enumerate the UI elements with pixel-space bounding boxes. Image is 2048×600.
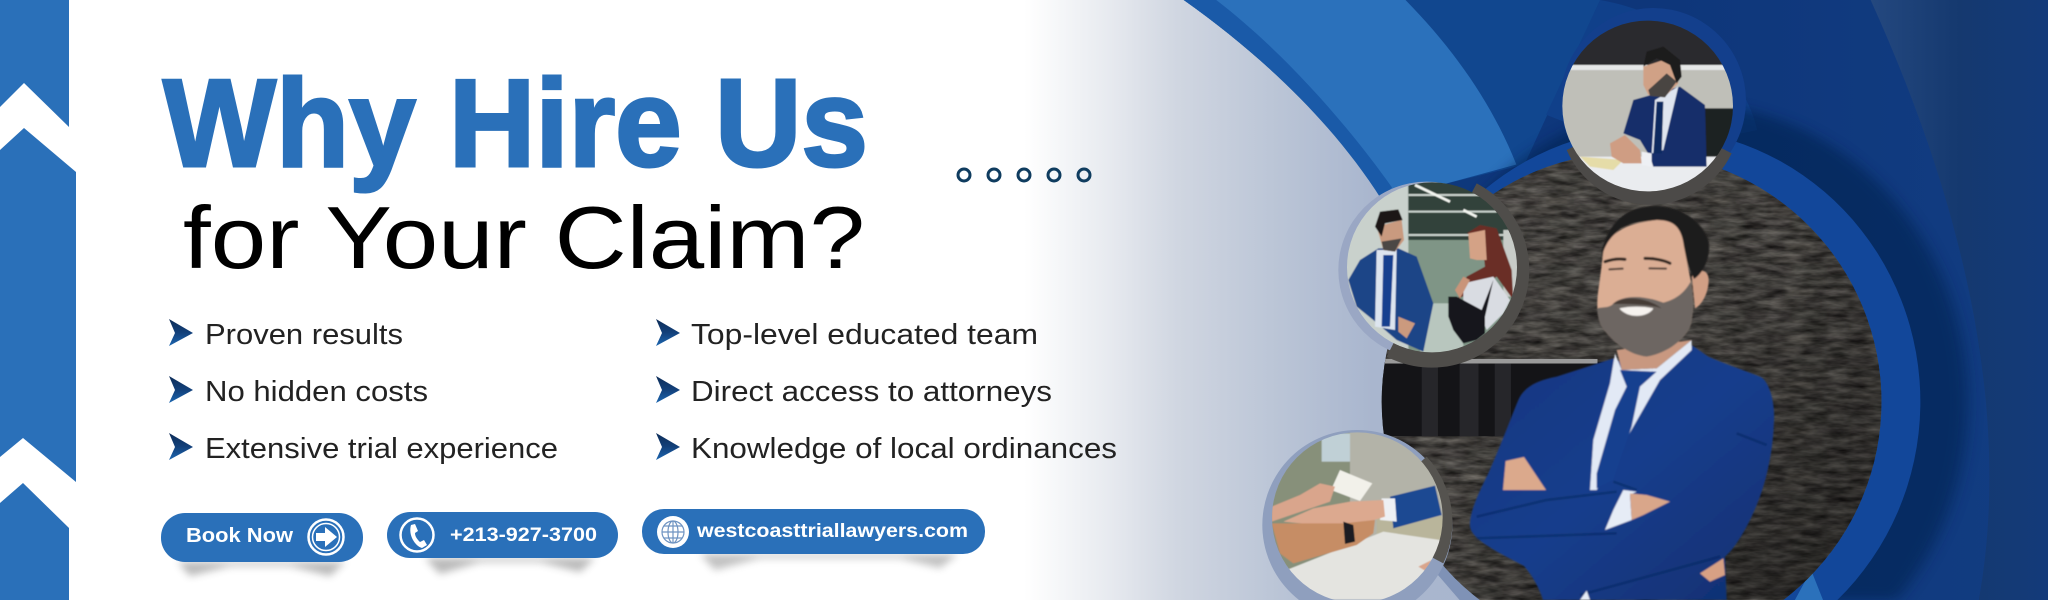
sleeve shading <box>1477 433 1767 595</box>
right decorative blue shapes and large photo <box>1184 0 2048 600</box>
lower hand <box>1700 558 1725 582</box>
man in blue suit <box>1470 206 1774 600</box>
right hand <box>1630 493 1670 520</box>
photo circle: handshake with card <box>1262 430 1452 600</box>
lower shirt tail <box>1580 591 1590 600</box>
bullet: direct access to attorneys: Direct access to attorneys <box>691 376 1052 408</box>
shirt cuff <box>1605 490 1637 530</box>
button: book now: Book Now <box>186 525 293 547</box>
mustache <box>1613 298 1662 308</box>
icon: arrow circle <box>308 520 344 554</box>
smile <box>1619 307 1653 316</box>
decorative five dots <box>958 169 1090 181</box>
ear <box>1692 271 1709 308</box>
ring around large circle <box>1386 103 1968 600</box>
left chevron strip <box>0 0 76 600</box>
button: phone number: +213-927-3700 <box>450 525 597 546</box>
navy curved background <box>1184 0 2048 600</box>
photo circle: man and client <box>1338 180 1529 368</box>
bullet: top-level educated team: Top-level educated team <box>691 319 1038 351</box>
photo circle: man at desk <box>1560 8 1746 205</box>
bullet: extensive trial experience: Extensive trial experience <box>205 433 558 465</box>
icon: phone <box>400 518 434 552</box>
brows and eyes <box>1605 258 1670 269</box>
subtitle: for your claim: for Your Claim? <box>183 188 865 287</box>
bullet: knowledge of local ordinances: Knowledge of local ordinances <box>691 433 1117 465</box>
bullet: proven results: Proven results <box>205 319 403 351</box>
icon: globe <box>657 516 689 548</box>
tie <box>1597 370 1657 488</box>
bullet: no hidden costs: No hidden costs <box>205 376 428 408</box>
button: website <box>642 509 985 570</box>
button: phone number <box>387 512 618 574</box>
hair <box>1602 206 1709 279</box>
shirt <box>1590 340 1692 490</box>
neck <box>1617 340 1692 370</box>
large brick photo circle <box>1382 160 1882 600</box>
button: book now <box>161 513 363 576</box>
left hand <box>1503 457 1546 490</box>
bullet list: right column <box>656 319 1117 465</box>
title: why hire us: Why Hire Us <box>163 55 868 193</box>
face <box>1597 220 1693 357</box>
beard <box>1597 282 1693 357</box>
button: website: westcoasttriallawyers.com <box>696 521 968 542</box>
bullet list: left column <box>169 319 558 465</box>
suit jacket <box>1470 345 1774 600</box>
